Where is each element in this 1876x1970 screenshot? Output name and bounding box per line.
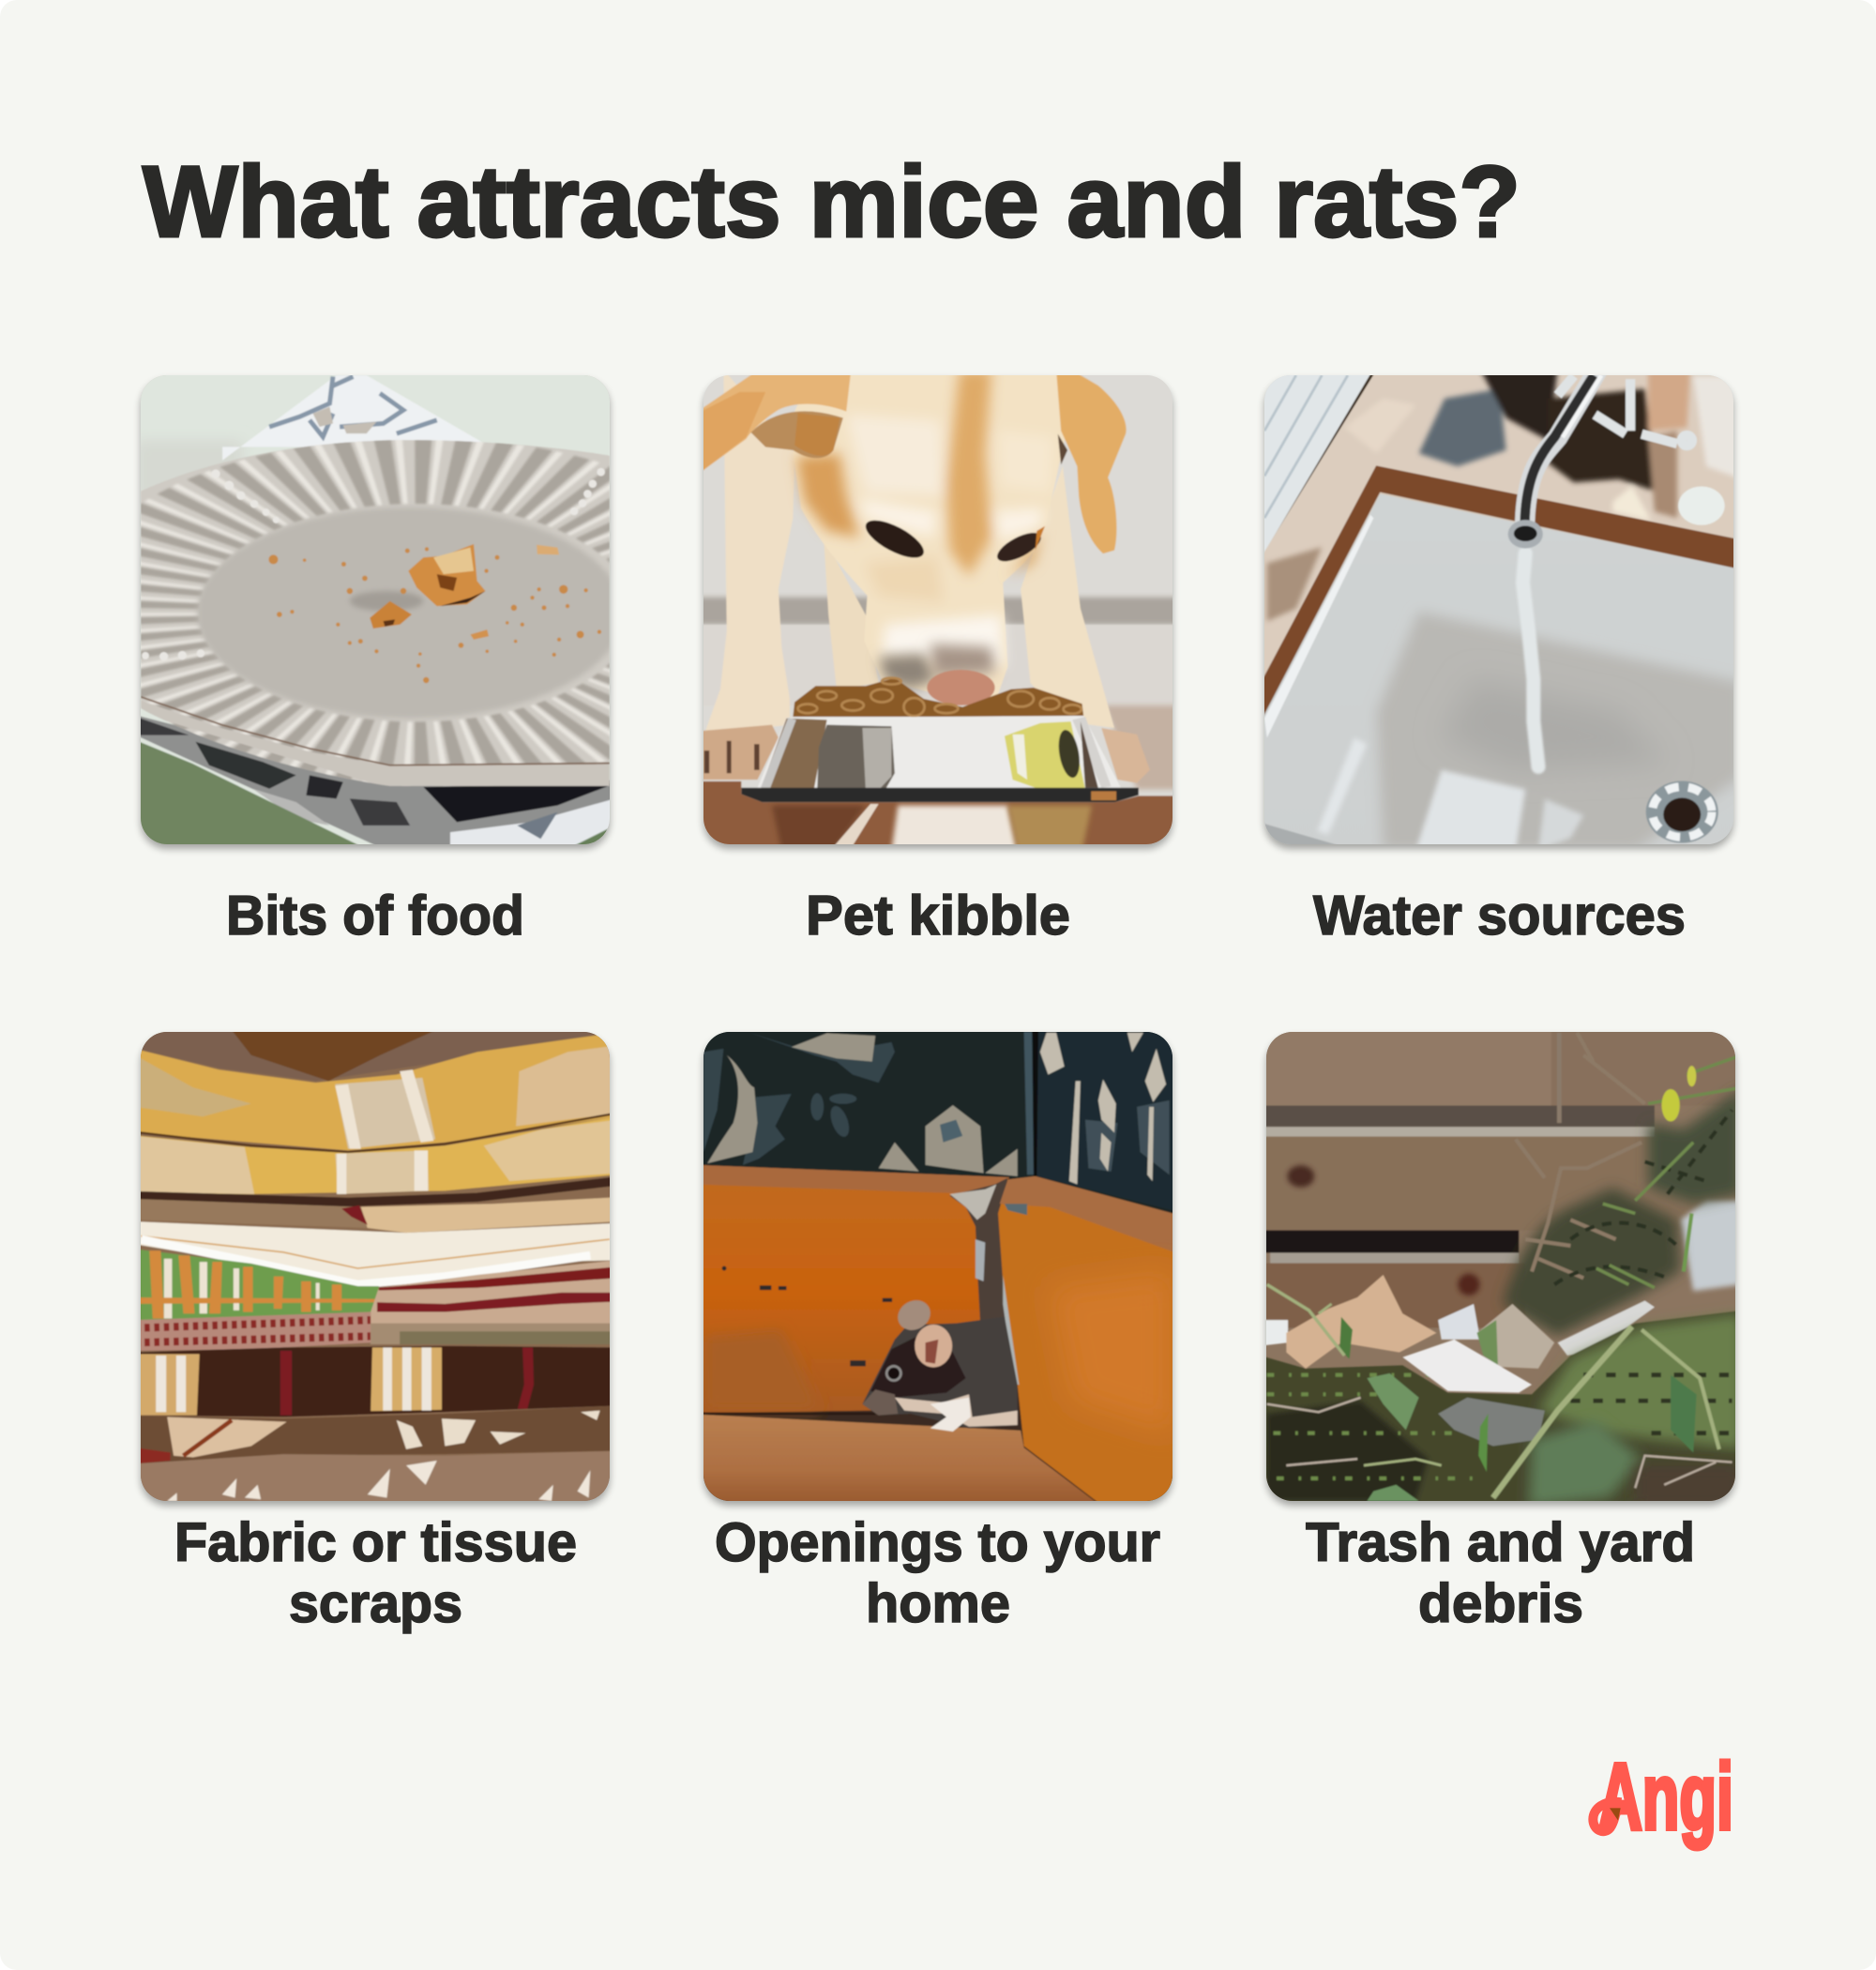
leaves and grass blades (1267, 1284, 1732, 1501)
label: pet kibble: Pet kibble (806, 885, 1070, 947)
photo: plate with crumbs (141, 375, 610, 844)
plastic bag at right (1680, 1201, 1742, 1291)
dark seam (135, 1181, 616, 1202)
checked cloth (135, 1312, 371, 1351)
nose (927, 670, 995, 705)
label: openings to your home: Openings to your (715, 1512, 1160, 1573)
water stream (1522, 553, 1538, 766)
label: bits of food: Bits of food (226, 885, 524, 947)
right baseboard (998, 1176, 1179, 1508)
mouse (862, 1295, 1018, 1432)
bowl (741, 716, 1139, 802)
label: fabric or tissue scraps: Fabric or tissue (174, 1512, 577, 1573)
left baseboard (698, 1165, 1009, 1415)
floor (698, 1415, 1103, 1508)
label: fabric or tissue scraps: scraps (289, 1573, 462, 1634)
white sheets (135, 1221, 616, 1286)
cloth napkin top (222, 375, 491, 461)
label: openings to your home: home (866, 1573, 1010, 1634)
right ear (1056, 370, 1127, 553)
photo: dog eating kibble (704, 375, 1172, 844)
title: What attracts mice and rats? (143, 144, 1520, 258)
ground debris (1261, 1311, 1742, 1508)
left ear (698, 370, 851, 475)
trash paper (1261, 1275, 1655, 1369)
drain plug disc (1678, 486, 1725, 525)
wooden sink rim (1257, 465, 1742, 728)
wooden fence (1261, 1026, 1742, 1329)
label: water sources: Water sources (1313, 885, 1686, 947)
photo: running water in sink (1264, 375, 1733, 844)
top folded cloth (135, 1026, 616, 1152)
bottom taupe quilt (135, 1451, 616, 1508)
crumbs (268, 544, 601, 683)
gnawed hole (949, 1178, 1007, 1324)
label: trash and yard debris: debris (1418, 1573, 1583, 1634)
sink basin (1257, 493, 1742, 851)
tan floral layer (135, 1197, 616, 1233)
draining rack (1257, 370, 1375, 567)
stone counter (1257, 370, 1742, 692)
plate (141, 439, 610, 788)
drain (1646, 781, 1718, 843)
floor (698, 781, 1179, 851)
dog legs (698, 370, 1150, 783)
weeds and branches (1503, 1033, 1742, 1336)
eyes (860, 513, 1045, 567)
label: trash and yard debris: Trash and yard (1306, 1512, 1695, 1573)
dark floral wallpaper (698, 1026, 1179, 1233)
second yellow fold (135, 1116, 616, 1194)
kibble pile (793, 678, 1083, 717)
dark wool blanket (135, 1346, 616, 1417)
red striped cloth (371, 1260, 616, 1344)
faucet (1508, 370, 1601, 549)
green plaid cloth (135, 1249, 379, 1322)
photo: mouse peeking through baseboard hole (704, 1032, 1172, 1501)
photo: stack of fabrics (141, 1032, 610, 1501)
photo: trash and yard debris (1266, 1032, 1735, 1501)
taps (1558, 376, 1692, 446)
brown floral quilt (135, 1405, 616, 1463)
dog head (793, 370, 1067, 699)
